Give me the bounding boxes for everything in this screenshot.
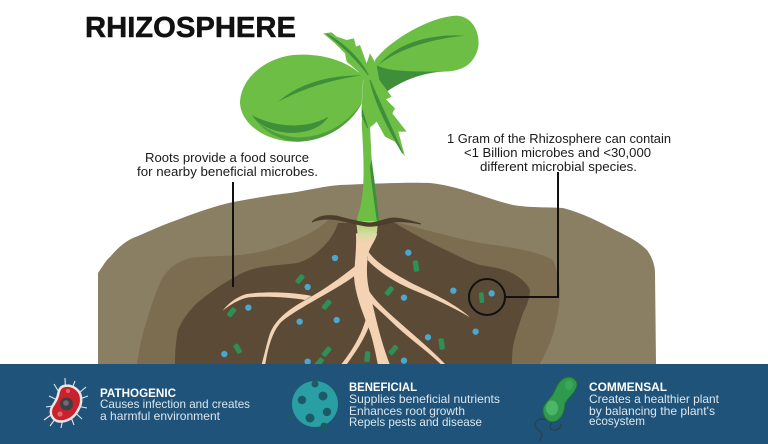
left leaf [240, 55, 363, 142]
stem shadow [362, 107, 379, 222]
right leaf shadow [377, 65, 443, 92]
callout: microbe count text: different microbial species. [480, 159, 637, 174]
text: pathogenic [100, 386, 250, 423]
text: pathogenic: Causes infection and creates [100, 397, 250, 411]
plant [240, 16, 479, 222]
soil mound [98, 183, 656, 364]
serrated centre leaf [323, 32, 407, 157]
callout line: magnifier [469, 172, 558, 315]
soil surface root line [312, 216, 421, 226]
stem base [356, 221, 378, 243]
text: beneficial [349, 380, 500, 429]
right leaf [375, 16, 479, 92]
text: pathogenic: a harmful environment [100, 409, 221, 423]
callout: microbe count text: <1 Billion microbes and <30,000 [464, 145, 651, 160]
left leaf lower shadow [252, 115, 328, 133]
text: commensal: ecosystem [589, 414, 645, 428]
callout: food source text: for nearby beneficial microbes. [137, 164, 318, 179]
roots [223, 233, 470, 367]
callout: microbe count text: 1 Gram of the Rhizosphere can contain [447, 131, 671, 146]
green microbes [226, 260, 484, 368]
left leaf lower edge shade [252, 103, 362, 142]
centre leaf veins [327, 34, 403, 153]
left leaf vein [278, 75, 362, 102]
text: beneficial: BENEFICIAL [349, 380, 417, 394]
callout: food source text: Roots provide a food source [145, 150, 309, 165]
text: commensal [589, 380, 720, 428]
inner soil layer [175, 222, 530, 364]
outer soil layer [98, 183, 656, 364]
callout line: roots [232, 182, 234, 287]
text: beneficial: Supplies beneficial nutrients [349, 392, 500, 406]
callout: microbe count text [447, 131, 671, 174]
text: commensal: Creates a healthier plant [589, 392, 720, 406]
microbes in the soil [221, 249, 495, 368]
middle soil layer [137, 218, 560, 364]
text: commensal: by balancing the plant's [589, 404, 715, 418]
legend banner [0, 364, 768, 444]
text: beneficial: Enhances root growth [349, 404, 465, 418]
right leaf vein [378, 35, 465, 65]
stem [357, 107, 379, 222]
icon: commensal microbe [535, 377, 577, 441]
icon: pathogenic microbe [44, 378, 88, 428]
text: commensal: COMMENSAL [589, 380, 667, 394]
icon: beneficial microbe [288, 378, 338, 432]
text: beneficial: Repels pests and disease [349, 415, 482, 429]
text: pathogenic: PATHOGENIC [100, 386, 176, 400]
callout: food source text [137, 150, 318, 179]
blue microbes [221, 249, 495, 365]
title: RHIZOSPHERE [85, 12, 296, 44]
